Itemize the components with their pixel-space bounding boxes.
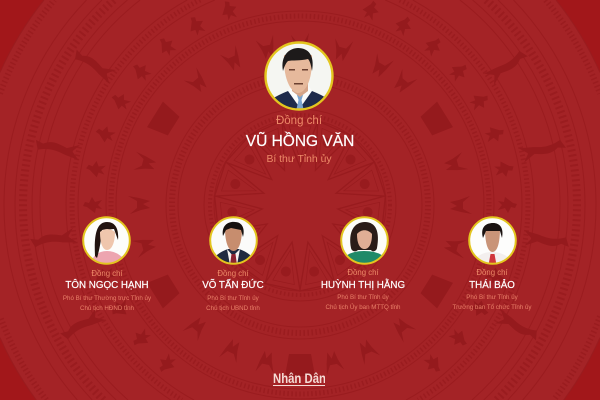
text: Võ Tấn Đức: Chủ tịch UBND tỉnh	[206, 305, 260, 312]
text: leader: VŨ HỒNG VĂN	[246, 133, 354, 150]
text: Võ Tấn Đức	[202, 269, 264, 312]
drum inner triangles	[215, 121, 385, 291]
text: Thái Bảo: Đồng chí	[476, 268, 508, 277]
text: Huỳnh Thị Hằng	[321, 268, 405, 311]
text: Huỳnh Thị Hằng: Phó Bí thư Tỉnh ủy	[337, 294, 389, 301]
text: Tôn Ngọc Hạnh	[63, 269, 151, 312]
text: Tôn Ngọc Hạnh: TÔN NGỌC HẠNH	[65, 280, 149, 291]
drum birds band	[83, 0, 517, 376]
portrait: Vũ Hồng Văn	[264, 41, 334, 111]
text: leader	[246, 114, 354, 165]
text: leader: Đồng chí	[276, 115, 322, 127]
text: Tôn Ngọc Hạnh: Chủ tịch HĐND tỉnh	[80, 305, 134, 312]
portrait: Võ Tấn Đức	[209, 216, 258, 265]
text: Thái Bảo	[452, 268, 532, 311]
text: Huỳnh Thị Hằng: Đồng chí	[347, 268, 379, 277]
portrait: Huỳnh Thị Hằng	[340, 216, 389, 265]
text: Võ Tấn Đức: VÕ TẤN ĐỨC	[202, 280, 264, 291]
drum herons band	[29, 45, 570, 345]
portrait: Tôn Ngọc Hạnh	[82, 216, 131, 265]
text: Huỳnh Thị Hằng: Chủ tịch Ủy ban MTTQ tỉnh	[326, 304, 400, 311]
text: Võ Tấn Đức: Đồng chí	[217, 269, 249, 278]
text: Huỳnh Thị Hằng: HUỲNH THỊ HẰNG	[321, 280, 405, 291]
text: Võ Tấn Đức: Phó Bí thư Tỉnh ủy	[207, 295, 259, 302]
drum figures band	[128, 33, 472, 376]
text: leader: Bí thư Tỉnh ủy	[266, 154, 332, 165]
text: Tôn Ngọc Hạnh: Đồng chí	[91, 269, 123, 278]
portrait: Thái Bảo	[468, 216, 517, 265]
text: Thái Bảo: Trưởng ban Tổ chức Tỉnh ủy	[453, 304, 531, 311]
text: Thái Bảo: Phó Bí thư Tỉnh ủy	[466, 294, 518, 301]
text: Tôn Ngọc Hạnh: Phó Bí thư Thường trực Tỉnh ủy	[63, 295, 151, 302]
text: Thái Bảo: THÁI BẢO	[469, 280, 515, 291]
